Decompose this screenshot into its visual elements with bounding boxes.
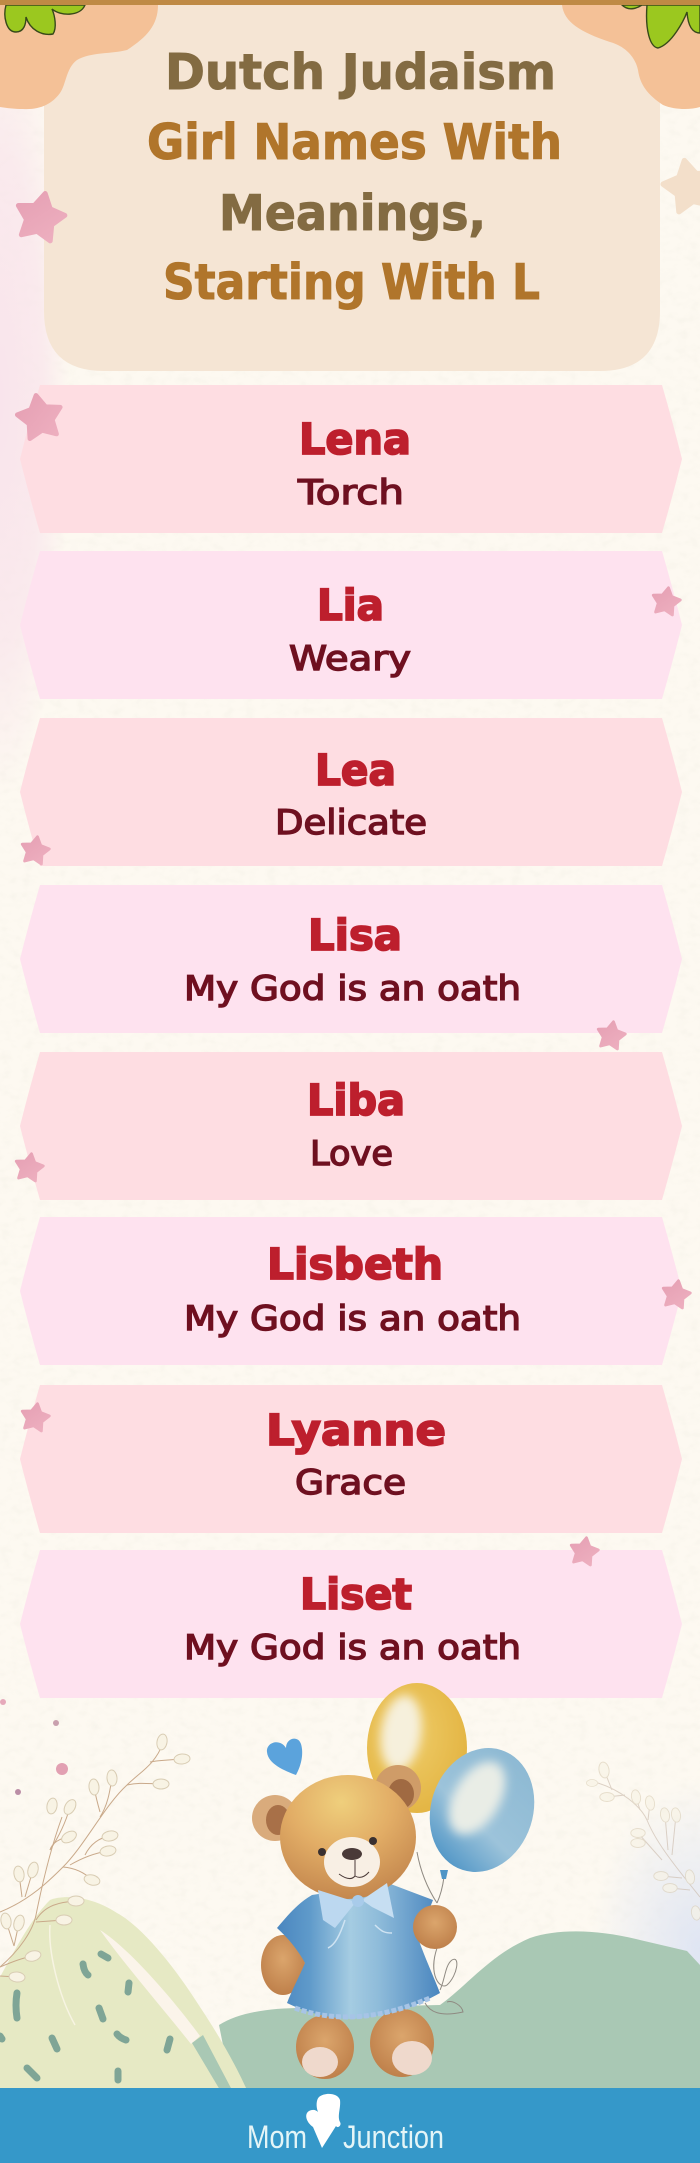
title text: Starting With L: [163, 254, 540, 311]
green hill: right: [219, 1931, 700, 2090]
bear ears: [252, 1765, 421, 1841]
row: Lisbeth: [20, 1217, 682, 1365]
scene: hills and plants: [0, 1699, 700, 2090]
row: Lea: [20, 718, 682, 866]
illustration: teddy bear with balloons: [252, 1683, 550, 2079]
logo wordmark: Junction: [343, 2119, 444, 2155]
row: Lia: [20, 551, 682, 699]
title panel: [0, 0, 700, 371]
title text: [147, 44, 562, 311]
dress: [277, 1883, 440, 2019]
leaf: top left: [5, 5, 85, 34]
star: left of title panel: [13, 189, 68, 243]
row: Lisbeth: Lisbeth: [267, 1240, 443, 1290]
row: Lisa: Lisa: [308, 911, 402, 961]
row: Lyanne: Lyanne: [266, 1406, 446, 1456]
row: Liba: Liba: [307, 1076, 405, 1126]
row: Lyanne: Grace: [295, 1463, 406, 1503]
row: Lea: Delicate: [275, 803, 427, 843]
row: Lena: Lena: [299, 415, 411, 465]
row: Lena: [20, 385, 682, 533]
logo wordmark: Mom: [247, 2119, 307, 2155]
logo icon: mother and child silhouette: [306, 2094, 341, 2148]
decorative stars over rows: [14, 392, 692, 1566]
leaf: top right: [622, 5, 700, 48]
row: Lia: Weary: [289, 639, 411, 679]
heart: blue: [267, 1739, 302, 1775]
row: Lisa: My God is an oath: [184, 969, 521, 1009]
bear arm: right: [413, 1905, 457, 1949]
row: Liset: My God is an oath: [184, 1628, 521, 1668]
row: Lea: Lea: [315, 746, 396, 796]
logo wordmark: [247, 2119, 444, 2155]
hill stripes: [50, 1925, 232, 2090]
row: Lyanne: [20, 1385, 682, 1533]
bear head: [280, 1775, 416, 1899]
bear legs: [296, 2009, 434, 2079]
blossom branch: right: [586, 1761, 700, 1921]
title text: Dutch Judaism: [165, 44, 556, 101]
row: Liba: Love: [310, 1134, 393, 1174]
light green hill: left: [0, 1897, 247, 2090]
row: Lisbeth: My God is an oath: [184, 1299, 521, 1339]
balloon: blue: [414, 1734, 550, 1886]
row: Liset: [20, 1550, 682, 1698]
row: Lena: Torch: [297, 473, 404, 513]
bear arm: left: [261, 1935, 305, 1995]
balloon strings: [417, 1852, 463, 2014]
logo: MomJunction: [247, 2094, 444, 2155]
decorative star: beige top right: [659, 155, 700, 214]
row: Lia: Lia: [317, 581, 384, 631]
row: Liba: [20, 1052, 682, 1200]
confetti dots: [0, 1699, 68, 1795]
corner blob: top right: [562, 5, 700, 109]
title text: Meanings,: [219, 185, 486, 242]
row: Liset: Liset: [300, 1570, 412, 1620]
blossom branch: left: [0, 1733, 190, 1983]
balloon: yellow: [367, 1683, 467, 1813]
row: Lisa: [20, 885, 682, 1033]
bow: [318, 1883, 394, 1928]
top bar: [0, 0, 700, 5]
title text: Girl Names With: [147, 114, 562, 171]
hill dashes: [0, 1954, 170, 2080]
corner blob: top left: [0, 5, 158, 109]
footer band: [0, 2088, 700, 2163]
